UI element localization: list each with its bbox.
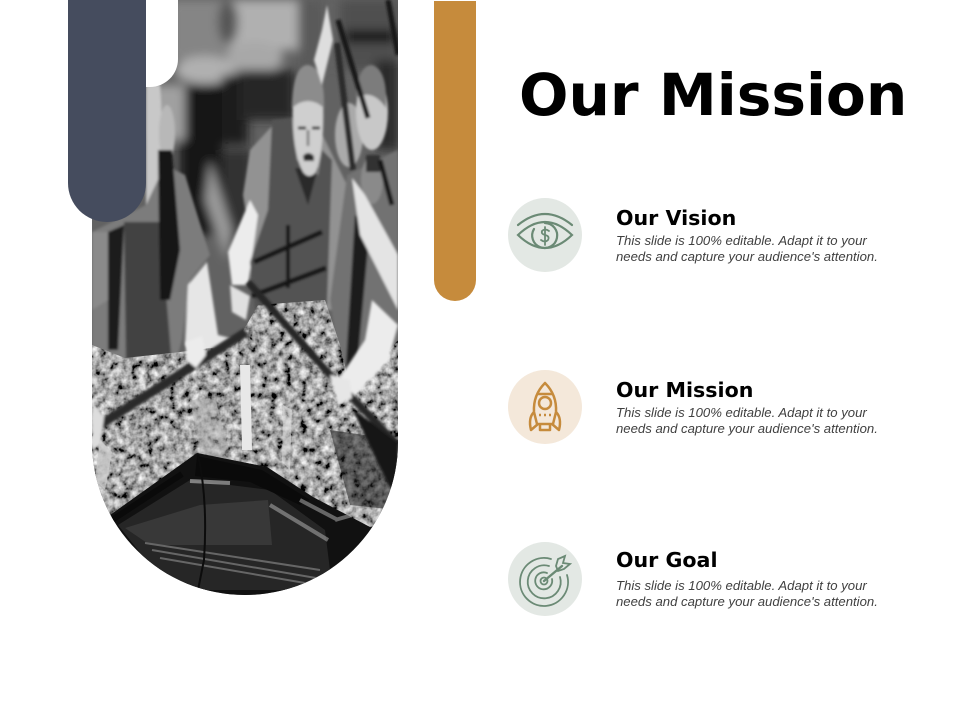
decor: white tab [146,0,178,87]
text: goal description [616,578,878,609]
text: vision description [616,233,878,264]
text: mission description: needs and capture your audience's attention. [616,421,878,436]
decor: navy bar [68,0,146,222]
icon: rocket [508,370,582,444]
title: Our Mission [519,61,907,129]
right soldiers [330,150,398,368]
text: goal description: This slide is 100% editable. Adapt it to your [616,578,867,593]
center soldier [243,125,352,310]
text: mission description [616,405,878,436]
text: vision description: needs and capture your audience's attention. [616,249,878,264]
text: goal description: needs and capture your audience's attention. [616,594,878,609]
heading: Our Mission: Our Mission [616,378,753,402]
photo: soldiers paddling a raft [92,0,398,595]
decor: gold bar [434,1,476,301]
camouflage trousers [92,290,398,535]
left soldier [92,0,398,400]
icon: eye with dollar [508,198,582,272]
text: vision description: This slide is 100% editable. Adapt it to your [616,233,867,248]
blurred crowd background [150,0,398,260]
raft [110,453,373,595]
text: mission description: This slide is 100% editable. Adapt it to your [616,405,867,420]
paddles and hands [92,282,398,500]
heading: Our Vision: Our Vision [616,206,736,230]
heading: Our Goal: Our Goal [616,548,718,572]
icon: target with arrow [508,542,582,616]
